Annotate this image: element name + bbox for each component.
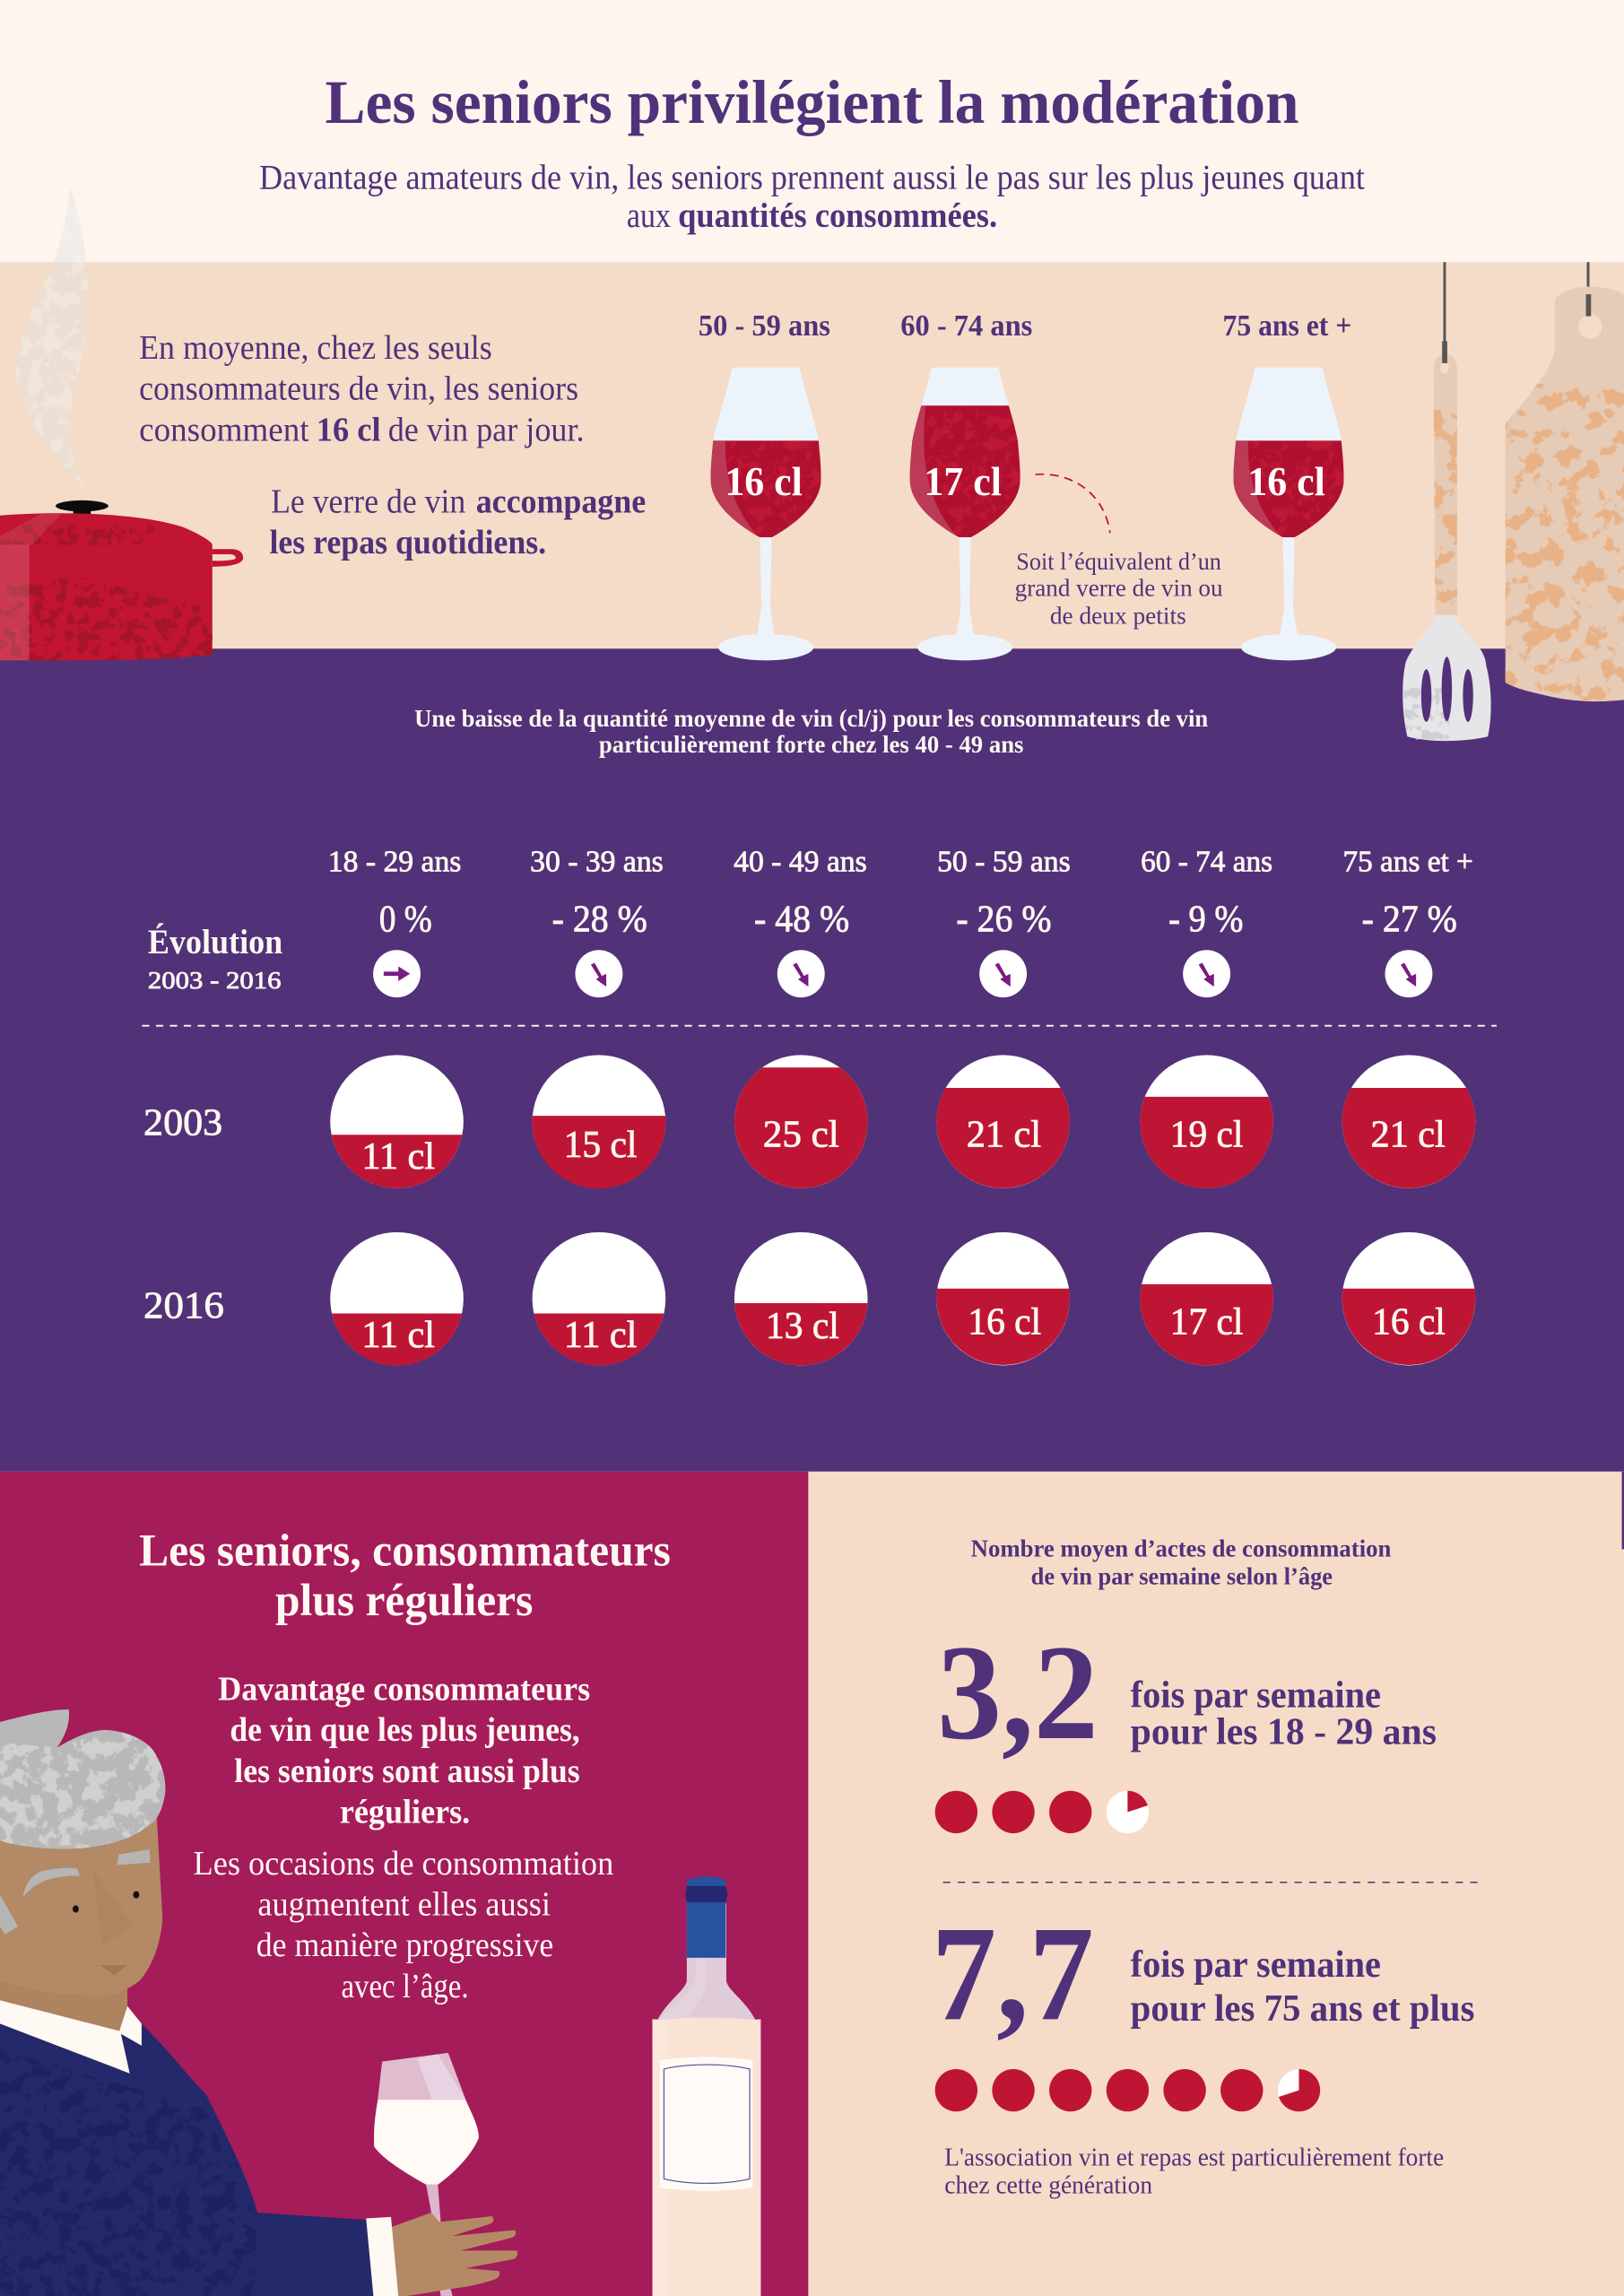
chart: 2016 fill circles: 16 cl <box>1372 1300 1446 1343</box>
text block: evolution label: Évolution <box>148 922 282 961</box>
heading: regular consumers <box>139 1525 671 1625</box>
statistic: 7,7: fois par semaine <box>1131 1944 1381 1986</box>
table: percentage changes: - 26 % <box>956 898 1051 940</box>
text block: regular consumers: avec l’âge. <box>341 1969 469 2005</box>
table: age headers: 60 - 74 ans <box>1141 844 1272 878</box>
callout: glass equivalent <box>1015 548 1223 630</box>
text block: daily meals <box>269 483 646 561</box>
heading: consumption acts: de vin par semaine selon l’âge <box>1031 1563 1333 1591</box>
subtitle <box>259 159 1365 235</box>
text block: daily meals: accompagne <box>476 483 646 520</box>
glass quantities: 16 cl <box>725 458 803 504</box>
text block: regular consumers: Les occasions de consommation <box>194 1846 613 1883</box>
panel: bottom left background <box>0 1472 808 2296</box>
panel: kitchen band background <box>0 262 1624 650</box>
chart: 2003 fill circles: 15 cl <box>564 1124 637 1166</box>
chart: 2003 fill circles: 21 cl <box>1370 1113 1446 1155</box>
dot chart: 3,2 <box>935 1791 1149 1833</box>
title: Les seniors privilégient la modération <box>326 68 1298 136</box>
sweater and collar <box>0 2000 373 2296</box>
icons: trend arrows <box>373 950 1432 997</box>
icon: cutting board <box>1506 262 1624 701</box>
table: percentage changes: 0 % <box>379 898 432 940</box>
table: percentage changes <box>379 898 1457 940</box>
heading: regular consumers: Les seniors, consommateurs <box>139 1525 671 1575</box>
chart: 2003 fill circles: 11 cl <box>361 1135 435 1178</box>
panel: purple background <box>0 648 1624 1472</box>
heading: consumption acts: Nombre moyen d’actes de consommation <box>971 1535 1392 1563</box>
table: age headers: 18 - 29 ans <box>328 844 461 878</box>
chart: 2016 fill circles: 16 cl <box>968 1300 1041 1343</box>
statistic: 7,7: pour les 75 ans et plus <box>1131 1987 1474 2030</box>
table: percentage changes: - 9 % <box>1168 898 1243 940</box>
callout: glass equivalent: de deux petits <box>1050 603 1186 630</box>
icon: steam <box>16 186 89 486</box>
icon: spatula <box>1403 262 1491 741</box>
text block: decline heading <box>414 705 1208 758</box>
text block: evolution label <box>148 922 282 995</box>
icon: wine glass 75+ <box>1230 366 1347 660</box>
text block: regular consumers: de manière progressive <box>256 1927 553 1964</box>
icon: wine glass 60-74 <box>907 366 1023 660</box>
table: age headers: 40 - 49 ans <box>734 844 867 878</box>
heading: consumption acts <box>971 1535 1392 1591</box>
text block: association note <box>944 2144 1444 2200</box>
text block: regular consumers: Davantage consommateurs <box>218 1672 590 1709</box>
table: age headers: 50 - 59 ans <box>937 844 1071 878</box>
table: percentage changes: - 48 % <box>754 898 849 940</box>
chart: 2003 fill circles: 25 cl <box>763 1113 839 1155</box>
text block: regular consumers: les seniors sont aussi plus <box>234 1753 580 1790</box>
table: percentage changes: - 28 % <box>552 898 647 940</box>
table: percentage changes: - 27 % <box>1362 898 1457 940</box>
text block: regular consumers: de vin que les plus jeunes, <box>230 1712 580 1749</box>
text block: average consumption: de vin par jour. <box>388 412 585 448</box>
statistic: 3,2 <box>937 1617 1437 1768</box>
chart: 2003 fill circles: 21 cl <box>967 1113 1041 1155</box>
age labels above glasses: 75 ans et + <box>1223 309 1351 343</box>
chart: 2016 fill circles <box>330 1232 1475 1366</box>
chart: 2016 fill circles: 13 cl <box>766 1305 839 1347</box>
illustration: senior man with glass <box>0 1709 517 2296</box>
subtitle: quantités consommées. <box>678 196 997 235</box>
icon: wine glass 50-59 <box>708 366 824 660</box>
table: age headers: 30 - 39 ans <box>530 844 664 878</box>
age labels above glasses: 60 - 74 ans <box>900 309 1032 343</box>
text block: association note: chez cette génération <box>944 2172 1152 2200</box>
glass quantities: 16 cl <box>1247 458 1325 504</box>
chart: 2003 fill circles <box>330 1055 1475 1188</box>
table: age headers: 75 ans et + <box>1342 844 1473 878</box>
dot chart: 7,7 <box>935 2069 1320 2111</box>
text block: average consumption: En moyenne, chez les seuls <box>139 330 492 367</box>
row label: 2016: 2016 <box>143 1284 224 1326</box>
text block: average consumption: consomment <box>139 412 309 448</box>
text block: regular consumers: augmentent elles aussi <box>257 1887 551 1924</box>
chart: 2016 fill circles: 17 cl <box>1170 1300 1243 1343</box>
panel: header <box>0 0 1624 262</box>
hand and cuff <box>366 2213 517 2296</box>
statistic: 7,7 <box>932 1898 1474 2048</box>
callout: glass equivalent: Soit l’équivalent d’un <box>1016 548 1221 575</box>
chart: 2016 fill circles: 11 cl <box>361 1314 435 1356</box>
text block: association note: L'association vin et repas est particulièrement forte <box>944 2144 1444 2172</box>
text block: evolution label: 2003 - 2016 <box>148 967 282 995</box>
icon: wine bottle <box>653 1877 760 2296</box>
hair <box>0 1709 166 1849</box>
row label: 2003: 2003 <box>143 1101 222 1144</box>
text block: average consumption: consommateurs de vin, les seniors <box>139 371 578 408</box>
arrow: dashed callout line <box>1036 474 1110 533</box>
statistic: 3,2: fois par semaine <box>1131 1674 1381 1717</box>
statistic: 3,2: pour les 18 - 29 ans <box>1131 1710 1437 1752</box>
chart: 2016 fill circles: 11 cl <box>564 1314 637 1356</box>
callout: glass equivalent: grand verre de vin ou <box>1015 574 1223 601</box>
text block: average consumption: 16 cl <box>317 412 381 448</box>
statistic: 3,2: 3,2 <box>937 1617 1099 1768</box>
text block: daily meals: Le verre de vin <box>271 483 466 520</box>
panel: bottom right background <box>808 1472 1624 2296</box>
age labels above glasses: 50 - 59 ans <box>699 309 830 343</box>
icon: cooking pot <box>0 500 243 660</box>
neck and face <box>0 1815 162 2031</box>
text block: decline heading: particulièrement forte chez les 40 - 49 ans <box>599 731 1023 758</box>
glass quantities: 17 cl <box>924 458 1002 504</box>
chart: 2003 fill circles: 19 cl <box>1170 1113 1243 1155</box>
text block: regular consumers: réguliers. <box>340 1795 470 1831</box>
wine glass in hand <box>374 2053 479 2296</box>
heading: regular consumers: plus réguliers <box>275 1575 533 1625</box>
age labels above glasses <box>699 309 1351 343</box>
table: age headers <box>328 844 1473 878</box>
subtitle: aux <box>627 196 671 235</box>
text block: daily meals: les repas quotidiens. <box>269 525 546 561</box>
statistic: 7,7: 7,7 <box>932 1898 1094 2048</box>
subtitle: Davantage amateurs de vin, les seniors prennent aussi le pas sur les plus jeunes quant <box>259 159 1365 197</box>
text block: average consumption <box>139 330 585 448</box>
glass quantities <box>725 458 1325 504</box>
text block: regular consumers <box>194 1672 613 2005</box>
text block: decline heading: Une baisse de la quantité moyenne de vin (cl/j) pour les consommateurs de vin <box>414 705 1208 732</box>
